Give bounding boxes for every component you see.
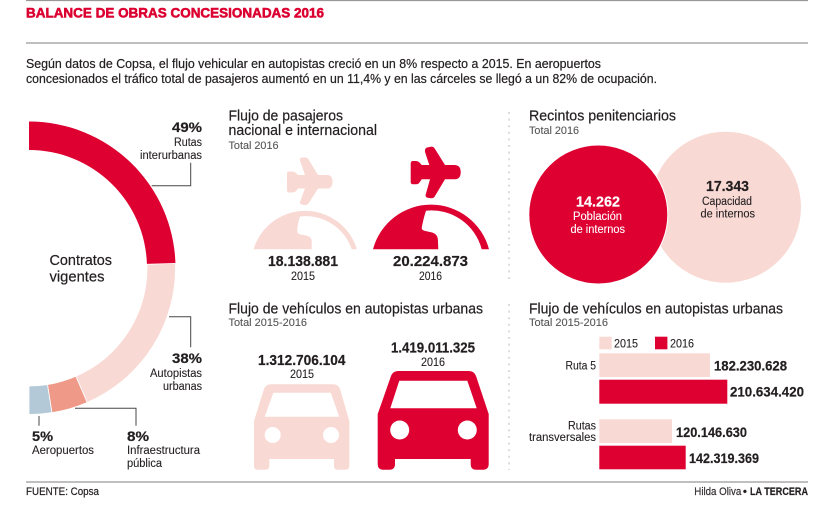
credit [694, 486, 808, 498]
bar group: ruta 5: 210.634.420 [730, 384, 804, 400]
callout: 38% autopistas urbanas: Autopistas [150, 368, 202, 380]
legend [599, 337, 694, 350]
intro text: Según datos de Copsa, el flujo vehicular en autopistas creció en un 8% respecto a 2015. En aeropuertos [26, 57, 601, 71]
value 2015: 2015 [291, 271, 315, 283]
segment: aeropuertos [29, 385, 52, 414]
heading: Total 2016 [529, 125, 579, 137]
heading: Total 2016 [228, 140, 278, 152]
heading [228, 109, 377, 152]
panel: contratos vigentes donut chart [29, 119, 203, 470]
value 2015 [268, 254, 338, 283]
callout: 49% rutas interurbanas: interurbanas [140, 150, 202, 162]
label: capacidad: Capacidad [702, 196, 752, 208]
label: capacidad: de internos [700, 209, 755, 221]
intro text: concesionados el tráfico total de pasajeros aumentó en un 11,4% y en las cárceles se llegó a un 82% de ocupación. [26, 72, 657, 86]
callout: 38% autopistas urbanas: 38% [172, 350, 203, 366]
segment: autopistas urbanas [76, 263, 176, 402]
bar group: rutas transversales: transversales [529, 432, 596, 444]
callout: 5% aeropuertos [32, 416, 94, 457]
credit: Hilda Oliva [694, 486, 742, 498]
value 2016 [393, 254, 468, 283]
label: poblacion [570, 195, 625, 236]
heading [529, 301, 783, 329]
callout: 38% autopistas urbanas [150, 317, 203, 393]
callout: 8% infraestructura publica: 8% [127, 428, 150, 444]
callout: 8% infraestructura publica [75, 408, 201, 470]
value 2016: 1.419.011.325 [391, 341, 475, 357]
value 2016: 20.224.873 [393, 254, 468, 270]
legend: 2016 [670, 338, 694, 350]
callout: 49% rutas interurbanas: 49% [172, 119, 203, 135]
heading: Total 2015-2016 [228, 317, 307, 329]
icon: red plane and globe 2016 [373, 147, 489, 249]
heading: nacional e internacional [228, 123, 377, 139]
circle: poblacion [529, 145, 668, 284]
label: capacidad: 17.343 [706, 179, 749, 195]
callout: 38% autopistas urbanas: urbanas [163, 381, 202, 393]
icon: pale plane and globe 2015 [254, 158, 357, 249]
legend: 2015 [614, 338, 638, 350]
center label: vigentes [50, 270, 104, 286]
heading: Flujo de pasajeros [228, 109, 343, 125]
callout: 8% infraestructura publica: pública [127, 458, 163, 470]
bar group: rutas transversales: Rutas [568, 420, 596, 432]
icon: red car 2016 [378, 371, 489, 470]
center label [50, 253, 112, 286]
bar group: rutas transversales: 142.319.369 [689, 450, 759, 466]
source: FUENTE: Copsa [26, 486, 100, 498]
panel: flujo de pasajeros [228, 109, 489, 283]
center label: Contratos [50, 253, 112, 269]
heading: Flujo de vehículos en autopistas urbanas [228, 301, 483, 317]
callout: 8% infraestructura publica: Infraestructura [127, 445, 201, 457]
label: capacidad [700, 179, 755, 221]
callout: 49% rutas interurbanas [140, 119, 203, 186]
heading [529, 109, 676, 137]
value 2016 [391, 341, 475, 369]
bar group: rutas transversales: 120.146.630 [676, 424, 747, 440]
heading [228, 301, 483, 329]
value 2015: 1.312.706.104 [258, 353, 346, 369]
circle: capacidad [650, 132, 801, 283]
label: poblacion: Población [573, 211, 622, 223]
value 2015: 18.138.881 [268, 254, 338, 270]
heading: Total 2015-2016 [529, 317, 608, 329]
heading: Flujo de vehículos en autopistas urbanas [529, 301, 783, 317]
credit: • [743, 486, 747, 498]
callout: 49% rutas interurbanas: Rutas [174, 137, 202, 149]
bar group: ruta 5: Ruta 5 [566, 360, 596, 372]
panel: flujo de vehiculos (cars) [228, 301, 489, 470]
panel: recintos penitenciarios [529, 109, 801, 284]
value 2015 [258, 353, 346, 381]
bar group: ruta 5 [566, 353, 804, 404]
segment: infraestructura publica [47, 376, 87, 413]
panel: flujo de vehiculos (bar chart) [529, 301, 804, 469]
value 2016: 2016 [419, 271, 442, 283]
value 2016: 2016 [421, 357, 445, 369]
callout: 5% aeropuertos: Aeropuertos [32, 445, 94, 457]
value 2015: 2015 [290, 369, 314, 381]
credit: LA TERCERA [750, 486, 808, 498]
segment: rutas interurbanas [29, 122, 175, 264]
bar group: rutas transversales [529, 419, 759, 469]
bar group: ruta 5: 182.230.628 [714, 358, 787, 374]
callout: 5% aeropuertos: 5% [32, 428, 54, 444]
intro text [26, 57, 657, 86]
heading: Recintos penitenciarios [529, 109, 676, 125]
label: poblacion: de internos [570, 224, 625, 236]
icon: pale car 2015 [254, 384, 349, 470]
label: poblacion: 14.262 [576, 195, 620, 211]
title: BALANCE DE OBRAS CONCESIONADAS 2016 [26, 6, 324, 20]
